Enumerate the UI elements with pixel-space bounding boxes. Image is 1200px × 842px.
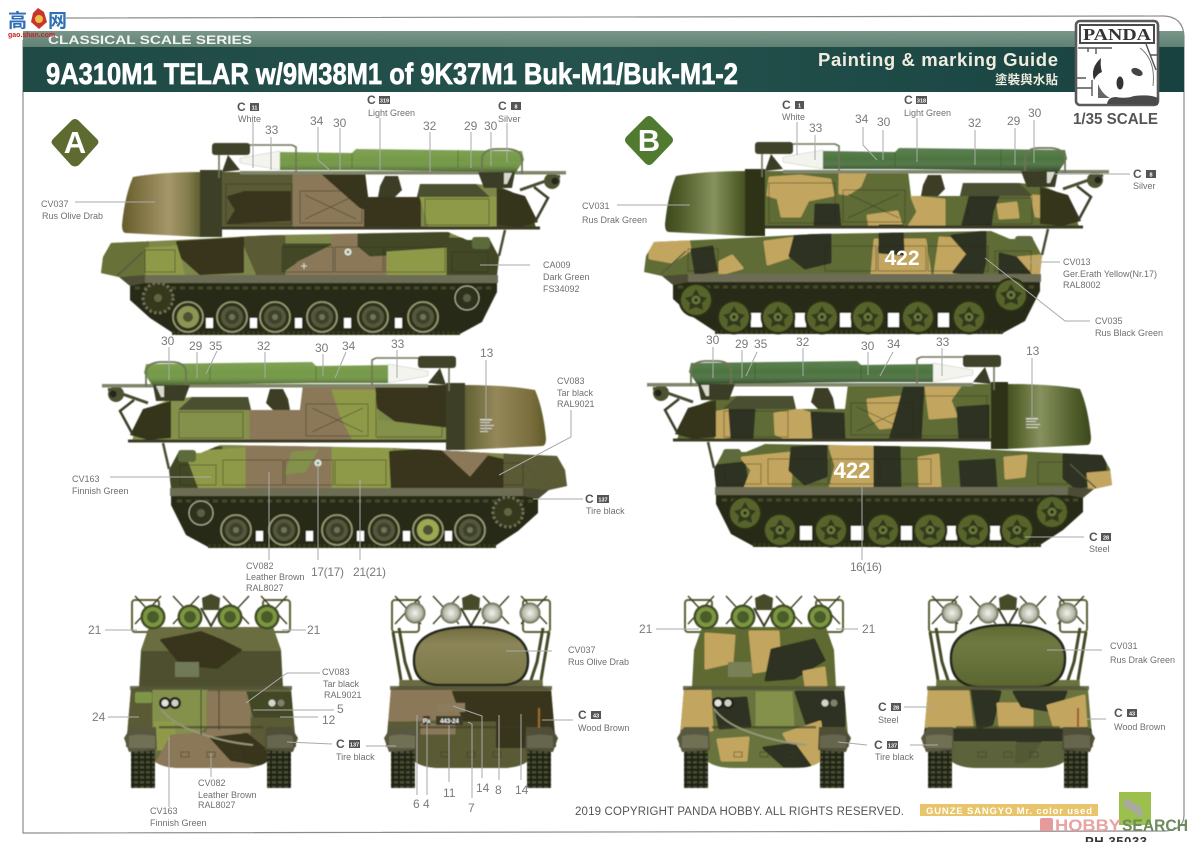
labels: scheme A rear view: Wood Brown — [578, 723, 629, 733]
labels: scheme B rear view — [878, 641, 1175, 732]
labels: scheme B upper side view: 32 — [968, 116, 982, 130]
labels: scheme A lower side view: CV083 — [557, 376, 585, 386]
labels: scheme A rear view: C — [578, 708, 587, 722]
labels: scheme A upper side view: 29 — [464, 119, 478, 133]
labels: scheme A rear view: 14 — [515, 783, 529, 797]
labels: scheme B upper side view: Silver — [1133, 181, 1156, 191]
labels: scheme A lower side view: CV082 — [246, 561, 274, 571]
labels: scheme A upper side view: 8 — [514, 104, 518, 110]
labels: scheme A lower side view: Leather Brown — [246, 572, 305, 582]
labels: scheme B front view: C — [874, 738, 883, 752]
labels: scheme A front view: CV163 — [150, 806, 178, 816]
panda logo: PANDA — [1083, 25, 1151, 44]
labels: scheme B upper side view: White — [782, 112, 805, 122]
labels: scheme A upper side view: 11 — [252, 106, 257, 112]
leader lines — [75, 118, 1130, 807]
labels: scheme A upper side view: CV037 — [41, 199, 69, 209]
labels: scheme A lower side view: 30 — [315, 341, 329, 355]
header band with title: 9A310M1 TELAR w/9M38M1 of 9K37M1 Buk-M1/Buk-M1-2 — [46, 58, 738, 91]
labels: scheme A upper side view: Rus Olive Drab — [42, 211, 103, 221]
labels: scheme A rear view: CV037 — [568, 645, 596, 655]
labels: scheme A upper side view — [41, 93, 590, 294]
labels: scheme B front view: Tire black — [875, 752, 914, 762]
labels: scheme A front view: Tire black — [336, 752, 375, 762]
labels: scheme B rear view: Wood Brown — [1114, 722, 1165, 732]
labels: scheme A front view: RAL9021 — [324, 690, 362, 700]
labels: scheme B upper side view: Rus Black Green — [1095, 328, 1163, 338]
labels: scheme A front view: 5 — [337, 702, 344, 716]
labels: scheme A upper side view: C — [367, 93, 376, 107]
labels: scheme B upper side view: 29 — [1007, 114, 1021, 128]
labels: scheme A front view: 12 — [322, 713, 336, 727]
labels: scheme B front view: 137 — [888, 744, 897, 750]
vehicle: scheme A side view facing left — [100, 143, 566, 335]
paint brand banner: GUNZE SANGYO Mr. color used — [926, 806, 1092, 817]
labels: scheme A upper side view: 30 — [484, 119, 498, 133]
labels: scheme B rear view: Rus Drak Green — [1110, 655, 1175, 665]
labels: scheme B upper side view: C — [1133, 167, 1142, 181]
labels: scheme A front view: 21 — [88, 623, 102, 637]
labels: scheme A front view: 137 — [350, 742, 359, 748]
labels: scheme A lower side view: 21(21) — [353, 565, 386, 579]
labels: scheme B front view — [639, 622, 914, 762]
vehicle: scheme A rear view: Pa — [423, 719, 431, 725]
subtitle: painting and marking guide: 塗裝與水貼 — [995, 72, 1058, 87]
vehicle: scheme A side view facing right — [102, 356, 570, 548]
labels: scheme A upper side view: White — [238, 114, 261, 124]
vehicle: scheme A rear view — [381, 594, 561, 788]
labels: scheme A lower side view — [72, 334, 625, 593]
header strip: series name: CLASSICAL SCALE SERIES — [48, 35, 252, 47]
labels: scheme B rear view: 43 — [1129, 712, 1135, 718]
labels: scheme A upper side view: 30 — [333, 116, 347, 130]
labels: scheme A front view: 24 — [92, 710, 106, 724]
labels: scheme A upper side view: 34 — [310, 114, 324, 128]
labels: scheme B upper side view: 318 — [917, 98, 926, 104]
vehicle: scheme B side view facing right — [647, 355, 1112, 548]
labels: scheme A upper side view: 33 — [265, 123, 279, 137]
labels: scheme B rear view: Steel — [878, 715, 899, 725]
labels: scheme A front view — [88, 623, 375, 828]
labels: scheme A front view: CV082 — [198, 778, 226, 788]
vehicle: scheme A front view — [121, 594, 301, 788]
labels: scheme B lower side view: 32 — [796, 335, 810, 349]
labels: scheme A rear view: 43 — [593, 714, 599, 720]
labels: scheme A rear view: 4 — [423, 797, 430, 811]
labels: scheme A upper side view: C — [498, 99, 507, 113]
copyright line: 2019 COPYRIGHT PANDA HOBBY. ALL RIGHTS RESERVED. — [575, 806, 904, 818]
labels: scheme A front view: CV083 — [322, 667, 350, 677]
watermark: site logo top left: 网 — [48, 11, 67, 32]
labels: scheme B upper side view — [582, 93, 1163, 338]
labels: scheme B upper side view: CV031 — [582, 201, 610, 211]
labels: scheme A lower side view: 35 — [209, 339, 223, 353]
labels: scheme A lower side view: RAL8027 — [246, 583, 284, 593]
vehicle marking 422 scheme B side: 422 — [884, 247, 920, 270]
labels: scheme A lower side view: Tar black — [557, 388, 594, 398]
vehicle: scheme B front view — [674, 594, 854, 788]
labels: scheme B rear view: 28 — [893, 706, 899, 712]
labels: scheme A rear view: Rus Olive Drab — [568, 657, 629, 667]
labels: scheme B upper side view: 33 — [809, 121, 823, 135]
labels: scheme B upper side view: CV035 — [1095, 316, 1123, 326]
vehicle: scheme B rear view — [918, 594, 1098, 788]
labels: scheme B lower side view: 13 — [1026, 344, 1040, 358]
labels: scheme B upper side view: C — [904, 93, 913, 107]
badge B: B — [638, 123, 660, 158]
labels: scheme A lower side view: 17(17) — [311, 565, 344, 579]
labels: scheme A upper side view: FS34092 — [543, 284, 580, 294]
labels: scheme A lower side view: C — [585, 492, 594, 506]
labels: scheme B rear view: CV031 — [1110, 641, 1138, 651]
labels: scheme B front view: 21 — [862, 622, 876, 636]
labels: scheme B upper side view: RAL8002 — [1063, 280, 1101, 290]
labels: scheme B lower side view: 30 — [706, 333, 720, 347]
labels: scheme A lower side view: CV163 — [72, 474, 100, 484]
labels: scheme A front view: Finnish Green — [150, 818, 207, 828]
labels: scheme A upper side view: Dark Green — [543, 272, 590, 282]
labels: scheme B upper side view: CV013 — [1063, 257, 1091, 267]
labels: scheme B upper side view: 1 — [798, 104, 801, 110]
labels: scheme B lower side view: C — [1089, 530, 1098, 544]
watermark: hobby search logo: HOBBY — [1055, 816, 1122, 835]
labels: scheme B upper side view: 34 — [855, 112, 869, 126]
labels: scheme B lower side view: 16(16) — [850, 560, 882, 574]
labels: scheme A front view: C — [336, 737, 345, 751]
labels: scheme A rear view: 8 — [495, 783, 502, 797]
labels: scheme A rear view — [413, 645, 629, 815]
labels: scheme A rear view: 11 — [443, 786, 456, 800]
labels: scheme A lower side view: RAL9021 — [557, 399, 595, 409]
header strip: series name — [23, 31, 1184, 47]
labels: scheme B upper side view: Rus Drak Green — [582, 215, 647, 225]
labels: scheme A upper side view: 319 — [380, 98, 389, 104]
labels: scheme A lower side view: Finnish Green — [72, 486, 129, 496]
labels: scheme A front view: RAL8027 — [198, 800, 236, 810]
labels: scheme B lower side view: 35 — [754, 337, 768, 351]
labels: scheme A front view: Tar black — [323, 679, 360, 689]
labels: scheme A lower side view: 34 — [342, 339, 356, 353]
watermark: site logo top left — [8, 8, 67, 39]
labels: scheme B upper side view: 8 — [1149, 172, 1153, 178]
panda logo — [1076, 21, 1158, 105]
labels: scheme B lower side view: 30 — [861, 339, 875, 353]
badge A — [52, 119, 98, 166]
labels: scheme A upper side view: C — [237, 100, 246, 114]
labels: scheme B lower side view: 33 — [936, 335, 950, 349]
watermark: hobby search logo: SEARCH — [1122, 816, 1188, 835]
labels: scheme A upper side view: CA009 — [543, 260, 571, 270]
labels: scheme A lower side view: 33 — [391, 337, 405, 351]
labels: scheme A lower side view: 30 — [161, 334, 175, 348]
labels: scheme A upper side view: 32 — [423, 119, 437, 133]
labels: scheme A upper side view: Light Green — [368, 108, 415, 118]
labels: scheme B upper side view: C — [782, 98, 791, 112]
labels: scheme A upper side view: Silver — [498, 114, 521, 124]
labels: scheme B upper side view: Light Green — [904, 108, 951, 118]
labels: scheme B lower side view: Steel — [1089, 544, 1110, 554]
labels: scheme A lower side view: Tire black — [586, 506, 625, 516]
subtitle: painting and marking guide — [818, 49, 1058, 87]
watermark: site logo top left: 高 — [8, 9, 27, 32]
labels: scheme B upper side view: 30 — [877, 115, 891, 129]
labels: scheme B front view: 21 — [639, 622, 653, 636]
labels: scheme B lower side view: 28 — [1103, 536, 1109, 542]
badge B — [625, 116, 673, 165]
watermark: hobby search logo — [1040, 792, 1188, 835]
labels: scheme B lower side view — [706, 333, 1111, 574]
badge A: A — [64, 125, 86, 160]
labels: scheme A rear view: 14 — [476, 781, 490, 795]
labels: scheme B upper side view: Ger.Erath Yellow(Nr.17) — [1063, 269, 1157, 279]
vehicle: scheme B side view facing left — [644, 142, 1109, 334]
vehicle: scheme A rear view: 443-24 — [440, 719, 460, 725]
labels: scheme A rear view: 7 — [468, 801, 475, 815]
labels: scheme A lower side view: 137 — [598, 498, 608, 504]
labels: scheme A rear view: 6 — [413, 797, 420, 811]
labels: scheme B rear view: C — [1114, 706, 1123, 720]
vehicle marking 422 scheme B lower side: 422 — [834, 458, 870, 483]
subtitle: painting and marking guide: Painting & marking Guide — [818, 49, 1058, 70]
header band with title — [23, 47, 1184, 92]
labels: scheme A front view: 21 — [307, 623, 321, 637]
labels: scheme B lower side view: 29 — [735, 337, 749, 351]
labels: scheme B rear view: C — [878, 700, 887, 714]
labels: scheme A lower side view: 13 — [480, 346, 494, 360]
labels: scheme B upper side view: 30 — [1028, 106, 1042, 120]
watermark: site logo top left: gao.shan.com — [8, 32, 55, 39]
labels: scheme A lower side view: 29 — [189, 339, 203, 353]
labels: scheme A front view: Leather Brown — [198, 790, 257, 800]
scale label: 1/35 SCALE — [1073, 111, 1158, 128]
labels: scheme B lower side view: 34 — [887, 337, 901, 351]
labels: scheme A lower side view: 32 — [257, 339, 271, 353]
